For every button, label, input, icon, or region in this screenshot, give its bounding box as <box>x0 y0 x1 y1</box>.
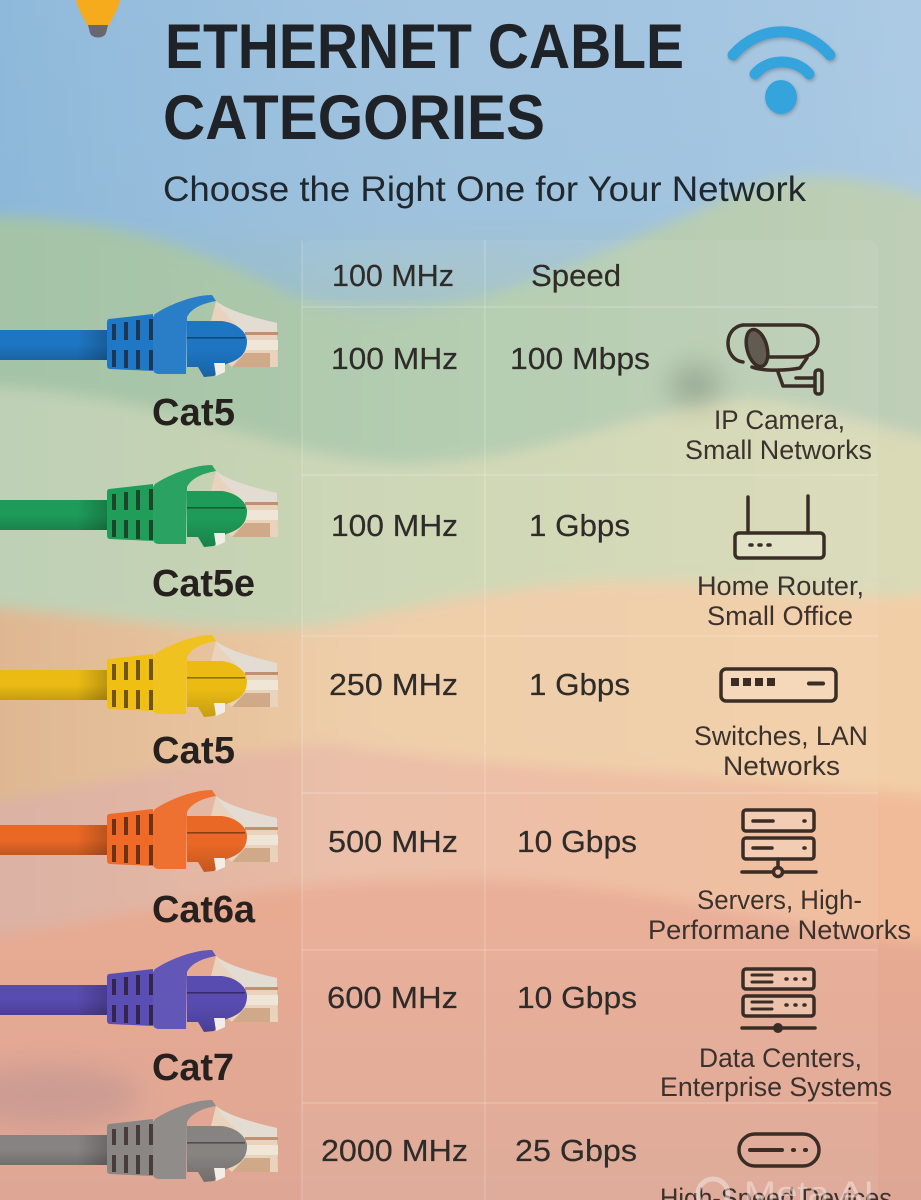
use case: IP Camera, <box>714 405 845 435</box>
use case: Enterprise Systems <box>660 1072 892 1102</box>
use case <box>648 885 911 945</box>
use case: Home Router, <box>697 571 864 601</box>
use case: Switches, LAN <box>694 721 868 751</box>
speed: 1 Gbps <box>529 508 630 543</box>
row: Cat5 yellow <box>0 635 868 781</box>
use case <box>697 571 864 631</box>
connector: yellow <box>0 635 278 717</box>
frequency: 500 MHz <box>328 824 458 859</box>
icon: device <box>739 1134 819 1166</box>
watermark: Meta AI <box>698 1175 874 1200</box>
row: Cat7 purple <box>0 950 892 1102</box>
row: Cat6a orange <box>0 790 911 945</box>
use case: Networks <box>723 751 840 781</box>
subtitle: Choose the Right One for Your Network <box>163 170 807 209</box>
label: Cat6a: Cat6a <box>152 889 256 931</box>
table header: 100 MHz <box>332 258 454 293</box>
use case <box>660 1043 892 1102</box>
row: Cat5 blue <box>0 295 872 465</box>
use case: Servers, High- <box>697 885 862 915</box>
use case: Data Centers, <box>699 1043 862 1073</box>
speed: 100 Mbps <box>510 341 650 376</box>
frequency: 100 MHz <box>331 341 458 376</box>
title <box>163 12 684 153</box>
icon: IP camera <box>728 325 822 394</box>
icon: data center <box>742 969 815 1033</box>
speed: 10 Gbps <box>517 980 637 1015</box>
connector: blue <box>0 295 278 377</box>
table header <box>332 258 621 293</box>
frequency: 100 MHz <box>331 508 458 543</box>
connector: green <box>0 465 278 547</box>
label: Cat7: Cat7 <box>152 1047 234 1089</box>
use case: Small Networks <box>685 435 872 465</box>
frequency: 2000 MHz <box>321 1133 468 1168</box>
label: Cat5: Cat5 <box>152 730 235 772</box>
connector: grey <box>0 1100 278 1182</box>
connector: orange <box>0 790 278 872</box>
row: Cat5e green <box>0 465 864 631</box>
connector: purple <box>0 950 278 1032</box>
panel: comparison table <box>302 240 878 1200</box>
label: Cat5e: Cat5e <box>152 563 255 605</box>
icon: servers <box>742 810 816 876</box>
icon: wifi <box>733 32 830 114</box>
icon: switch <box>721 669 836 701</box>
speed: 10 Gbps <box>517 824 637 859</box>
icon: light bulb <box>76 0 120 38</box>
frequency: 600 MHz <box>327 980 458 1015</box>
speed: 25 Gbps <box>515 1133 637 1168</box>
title: CATEGORIES <box>163 83 545 153</box>
use case: Small Office <box>707 601 853 631</box>
frequency: 250 MHz <box>329 667 458 702</box>
table header: Speed <box>531 258 621 293</box>
row: grey <box>0 1100 892 1200</box>
icon: router <box>735 496 824 558</box>
use case: Performane Networks <box>648 915 911 945</box>
use case <box>694 721 868 781</box>
label: Cat5: Cat5 <box>152 392 235 434</box>
use case <box>685 405 872 465</box>
speed: 1 Gbps <box>529 667 630 702</box>
title: ETHERNET CABLE <box>165 12 684 82</box>
